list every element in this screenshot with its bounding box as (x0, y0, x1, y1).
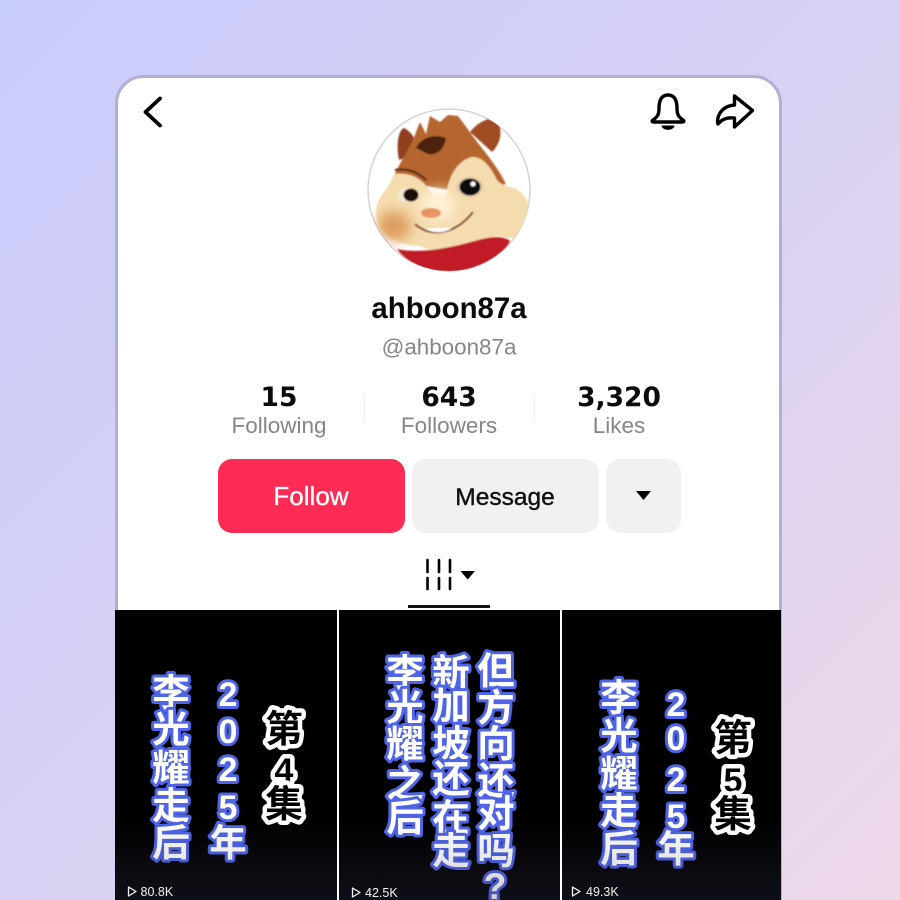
title column: 新加坡还在走: 新 (432, 652, 470, 694)
avatar (368, 109, 530, 272)
title column: 李光耀走后: 后 (600, 828, 638, 870)
title column: 李光耀之后: 光 (386, 687, 424, 729)
nose (421, 208, 441, 218)
view count: 42.5K (365, 886, 398, 900)
title column: 但方向还对吗？: 方 (477, 687, 515, 729)
stat: followers: 643 (421, 382, 477, 413)
title column: 新加坡还在走: 坡 (432, 723, 470, 765)
icon: share arrow (718, 96, 752, 127)
title column: 但方向还对吗？: 向 (477, 723, 515, 765)
icon: notification bell (652, 95, 684, 129)
message button (412, 459, 599, 533)
icon: back chevron (146, 98, 160, 126)
title column: 2025年: 2 (667, 761, 685, 799)
left cheek shade (377, 211, 411, 241)
stat: following: Following (231, 413, 327, 438)
title column: 2025年: 2 (667, 686, 685, 724)
title column: 李光耀走后: 光 (152, 708, 190, 750)
title column: 2025年: 年 (657, 828, 695, 870)
left ear (398, 128, 419, 160)
hair dark patch (416, 136, 446, 154)
follow button: Follow (273, 481, 349, 511)
face and cheeks (376, 157, 530, 252)
title column: 李光耀之后: 李 (386, 652, 424, 694)
video tile 2 (339, 610, 560, 900)
display name: ahboon87a (371, 292, 527, 325)
title column: 但方向还对吗？: 但 (477, 650, 515, 692)
title column: 第5集: 第 (714, 717, 752, 759)
title column: 第4集: 集 (265, 783, 303, 825)
smile (415, 212, 473, 232)
view count: 80.8K (140, 885, 174, 899)
title column: 第5集: 5 (724, 762, 742, 800)
brow dark line (395, 169, 426, 180)
videos tab icon (428, 560, 475, 589)
title column: 2025年: 0 (667, 720, 685, 758)
right ear (470, 119, 501, 152)
title column: 李光耀走后: 光 (600, 715, 638, 757)
active tab underline (408, 605, 490, 608)
nose shade (422, 189, 454, 221)
view count: 49.3K (586, 885, 619, 899)
stat: likes: 3,320 (577, 382, 661, 413)
title column: 新加坡还在走: 还 (432, 758, 470, 800)
title column: 李光耀走后: 走 (152, 785, 190, 827)
dropdown button (606, 459, 681, 533)
title column: 李光耀走后: 后 (152, 822, 190, 864)
title column: 李光耀走后: 走 (600, 790, 638, 832)
title column: 李光耀走后: 李 (600, 677, 638, 719)
title column: 第4集: 第 (265, 708, 303, 750)
stat: followers: Followers (401, 413, 497, 438)
stat: likes (577, 382, 661, 438)
message button: Message (455, 484, 555, 511)
stat: likes: Likes (593, 413, 645, 438)
stat: followers (401, 382, 497, 438)
title column: 但方向还对吗？: 吗 (477, 830, 515, 872)
head fur (394, 115, 506, 190)
left eye (397, 188, 419, 202)
video tile 3 (562, 610, 781, 900)
handle: @ahboon87a (382, 334, 517, 360)
title column: 李光耀走后: 耀 (152, 747, 190, 789)
title column: 2025年: 2 (219, 676, 237, 714)
title column: 李光耀之后: 后 (386, 797, 424, 839)
title column: 李光耀之后: 耀 (386, 723, 424, 765)
stat: following (231, 382, 327, 438)
title column: 2025年: 年 (209, 822, 247, 864)
title column: 但方向还对吗？: 对 (477, 793, 515, 835)
stat: following: 15 (261, 382, 297, 413)
title column: 2025年: 5 (667, 798, 685, 836)
video tile 1 (115, 610, 337, 900)
title column: 2025年: 0 (219, 713, 237, 751)
title column: 李光耀走后: 耀 (600, 753, 638, 795)
title column: 2025年: 5 (219, 789, 237, 827)
view count (572, 885, 619, 899)
title column: 第5集: 集 (714, 793, 752, 835)
title column: 新加坡还在走: 走 (432, 830, 470, 872)
follow button (218, 459, 405, 533)
title column: 新加坡还在走: 加 (432, 685, 470, 727)
right eye (456, 177, 484, 197)
title column: 新加坡还在走: 在 (432, 797, 470, 839)
title column: 2025年: 2 (219, 751, 237, 789)
title column: 但方向还对吗？: 还 (477, 760, 515, 802)
title column: 李光耀之后: 之 (386, 763, 424, 805)
red scarf (397, 237, 510, 272)
profile card (116, 76, 780, 900)
title column: 第4集: 4 (275, 752, 294, 790)
title column: 李光耀走后: 李 (152, 672, 190, 714)
